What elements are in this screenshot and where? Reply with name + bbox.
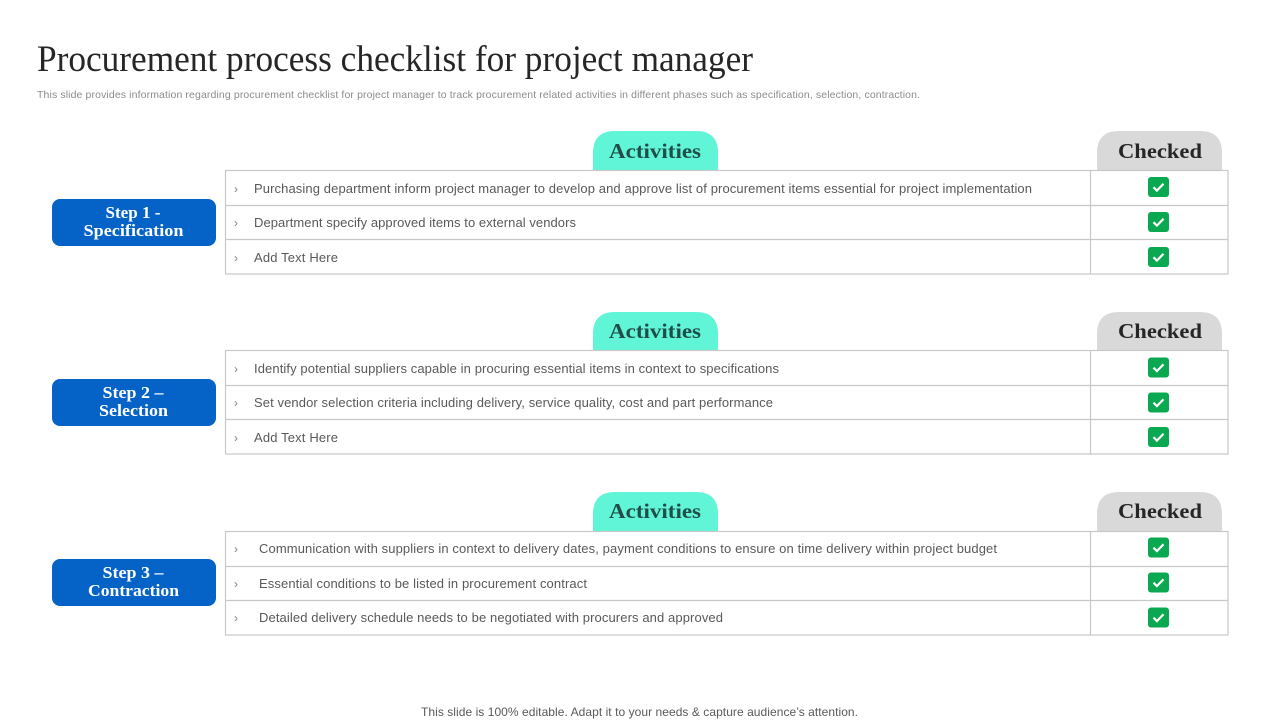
step 2 label bbox=[52, 379, 216, 426]
activities tab 1 bbox=[593, 131, 718, 170]
icon: check bbox=[1148, 247, 1169, 267]
checked tab 2: Checked bbox=[1118, 319, 1202, 343]
activities tab 2: Activities bbox=[609, 319, 701, 343]
icon: check bbox=[1148, 358, 1169, 378]
row text 1: Identify potential suppliers capable in procuring essential items in context to specifications bbox=[254, 361, 780, 376]
panel: step 2 bbox=[52, 312, 1228, 454]
row text 3: Add Text Here bbox=[254, 250, 338, 265]
step 2 label: Selection bbox=[99, 401, 168, 420]
step 3 label: Step 3 – bbox=[102, 563, 164, 582]
row text 2: › bbox=[234, 577, 238, 591]
row text 2: Essential conditions to be listed in procurement contract bbox=[259, 576, 587, 591]
row text 3: › bbox=[234, 611, 238, 625]
step 3 label: Contraction bbox=[88, 581, 179, 600]
icon: check bbox=[1148, 427, 1169, 447]
checklist table 1 bbox=[225, 170, 1228, 274]
row text 2: Department specify approved items to external vendors bbox=[254, 215, 576, 230]
row text 3: › bbox=[234, 251, 238, 265]
icon: check bbox=[1148, 608, 1169, 628]
step 2 label: Step 2 – bbox=[102, 383, 164, 402]
checked tab 1: Checked bbox=[1118, 139, 1202, 163]
activities tab 1: Activities bbox=[609, 139, 701, 163]
activities tab 3: Activities bbox=[609, 499, 701, 523]
row text 1: Purchasing department inform project manager to develop and approve list of procurement items essential for project implementation bbox=[254, 181, 1032, 196]
icon: check bbox=[1148, 392, 1169, 412]
title: Procurement process checklist for project manager bbox=[37, 38, 753, 79]
step 3 label bbox=[52, 559, 216, 606]
row text 1: Communication with suppliers in context to delivery dates, payment conditions to ensure on time delivery within project budget bbox=[259, 541, 997, 556]
checklist table 2 bbox=[225, 350, 1228, 454]
checklist table 3 bbox=[225, 531, 1228, 635]
row text 1: › bbox=[234, 362, 238, 376]
panel: step 1 bbox=[52, 131, 1228, 274]
row text 3: › bbox=[234, 431, 238, 445]
icon: check bbox=[1148, 572, 1169, 592]
panel: step 3 bbox=[52, 492, 1228, 635]
step 1 label: Specification bbox=[84, 221, 184, 240]
row text 2: › bbox=[234, 216, 238, 230]
row text 1: › bbox=[234, 542, 238, 556]
icon: check bbox=[1148, 212, 1169, 232]
row text 3: Detailed delivery schedule needs to be negotiated with procurers and approved bbox=[259, 610, 723, 625]
row text 2: Set vendor selection criteria including delivery, service quality, cost and part performance bbox=[254, 395, 773, 410]
row text 3: Add Text Here bbox=[254, 430, 338, 445]
step 1 label: Step 1 - bbox=[106, 203, 160, 222]
icon: check bbox=[1148, 177, 1169, 197]
row text 1: › bbox=[234, 182, 238, 196]
row text 2: › bbox=[234, 396, 238, 410]
checked tab 2 bbox=[1097, 312, 1222, 350]
checked tab 1 bbox=[1097, 131, 1222, 170]
activities tab 2 bbox=[593, 312, 718, 350]
checked tab 3: Checked bbox=[1118, 499, 1202, 523]
icon: check bbox=[1148, 538, 1169, 558]
activities tab 3 bbox=[593, 492, 718, 531]
checked tab 3 bbox=[1097, 492, 1222, 531]
step 1 label bbox=[52, 199, 216, 246]
footer note: This slide is 100% editable. Adapt it to your needs & capture audience’s attention. bbox=[421, 705, 858, 719]
subtitle: This slide provides information regarding procurement checklist for project manager to track procurement related activities in different phases such as specification, selection, contraction. bbox=[37, 89, 920, 101]
